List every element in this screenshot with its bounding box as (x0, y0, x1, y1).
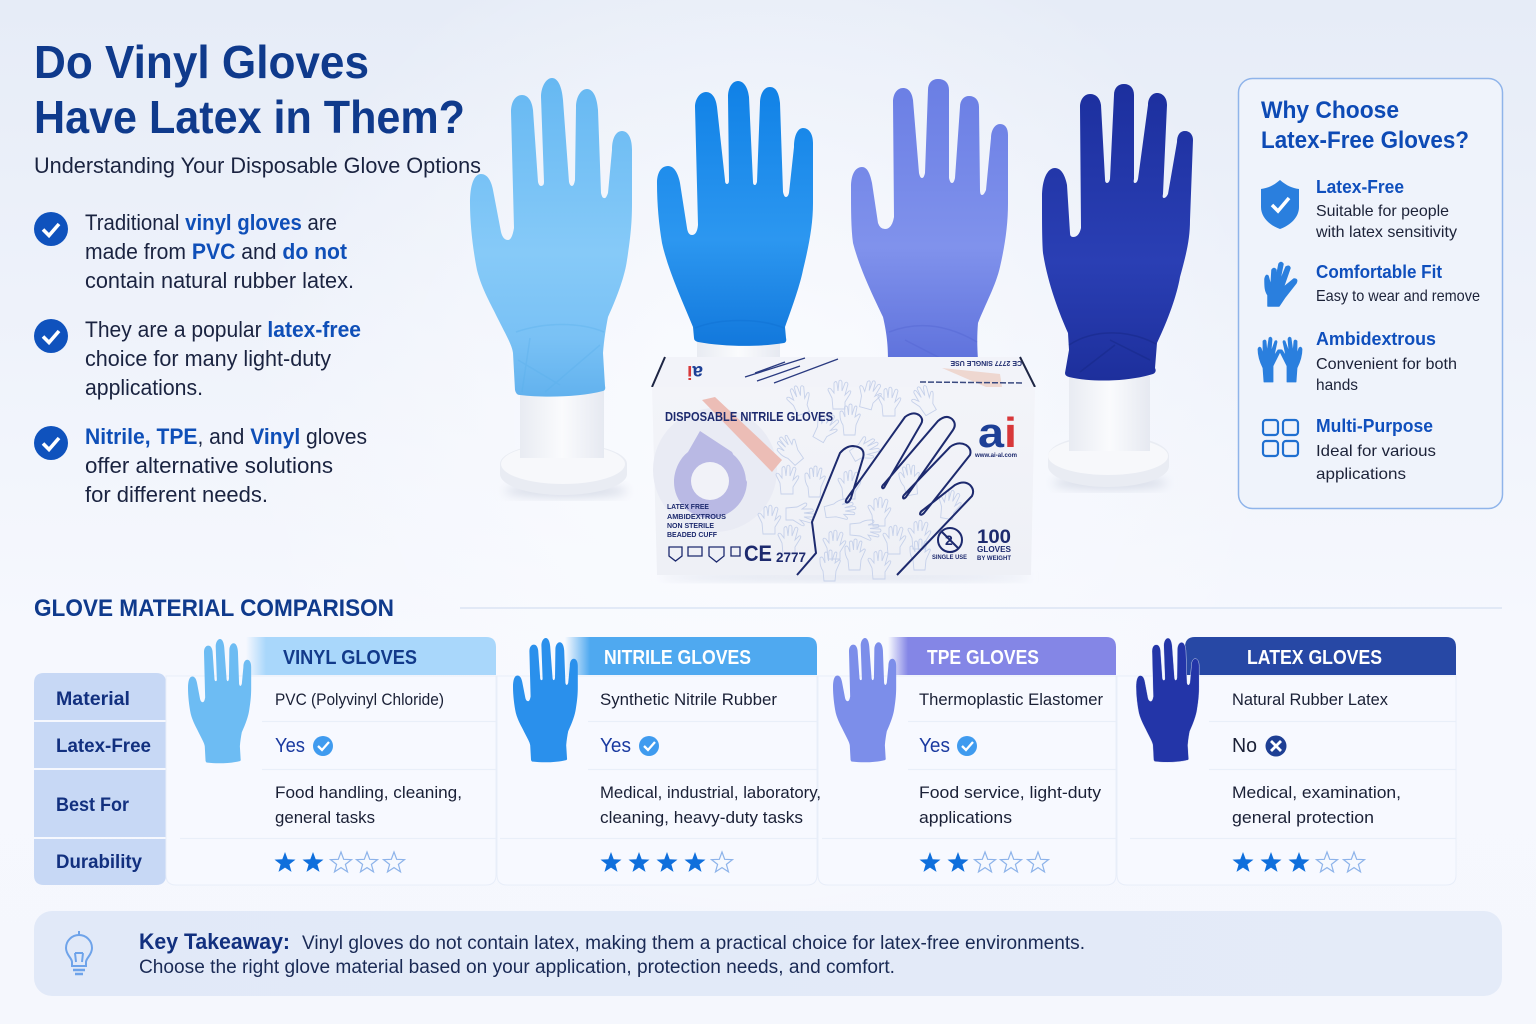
small vinyl glove (188, 639, 251, 763)
bullet list (34, 210, 367, 507)
box features list: NON STERILE (667, 523, 714, 530)
column: nitrile gloves: Synthetic Nitrile Rubber (600, 690, 777, 709)
takeaway text: Vinyl gloves do not contain latex, making them a practical choice for latex-free environments. (302, 933, 1085, 954)
glove: periwinkle TPE (851, 79, 1008, 360)
row labels: Material (56, 689, 130, 710)
title (34, 36, 465, 143)
row labels: Durability (56, 852, 142, 873)
item: latex-free (1315, 177, 1457, 241)
column: nitrile gloves: Yes (600, 735, 631, 757)
small tpe glove (833, 638, 896, 762)
bullet 3: Nitrile, TPE, and Vinyl gloves (85, 424, 367, 449)
tpe header (888, 637, 1116, 675)
box top face: CE 2777 SINGLE USE (950, 359, 1022, 366)
panel heading: Latex-Free Gloves? (1261, 127, 1469, 154)
box certification marks: CE (744, 541, 772, 566)
panel: why choose latex-free gloves (1238, 78, 1502, 508)
bullet 2: choice for many light-duty (85, 346, 331, 371)
no cross (1266, 736, 1286, 756)
box top face: ai (687, 361, 703, 382)
icon: lightbulb (66, 931, 92, 974)
latex header (1185, 637, 1456, 675)
icon: grid (1263, 420, 1298, 456)
box certification marks (669, 541, 806, 566)
durability stars (600, 852, 732, 872)
bullet 1 (34, 210, 354, 293)
single use mark (932, 528, 967, 561)
icon: shield (1261, 180, 1299, 229)
item: multi-purpose: Ideal for various (1316, 443, 1436, 460)
nitrile header: NITRILE GLOVES (604, 647, 751, 669)
item: ambidextrous: Ambidextrous (1316, 329, 1436, 349)
yes check (639, 736, 659, 756)
box artwork: small hand pattern (758, 378, 963, 581)
column: nitrile gloves (497, 637, 821, 885)
box logo: ai (978, 409, 1017, 456)
column: nitrile gloves: cleaning, heavy-duty tasks (600, 808, 803, 827)
column: tpe gloves: Thermoplastic Elastomer (919, 690, 1103, 709)
title: Do Vinyl Gloves (34, 36, 369, 88)
column: latex gloves: Medical, examination, (1232, 783, 1401, 802)
column: tpe gloves: Food service, light-duty (919, 783, 1102, 802)
product box (652, 357, 1035, 581)
stand: nitrile glove (697, 338, 780, 362)
bullet 3: offer alternative solutions (85, 453, 333, 478)
single use mark: 2 (945, 532, 953, 548)
column: tpe gloves: applications (919, 808, 1012, 827)
column: vinyl gloves: general tasks (275, 808, 375, 827)
item: multi-purpose (1316, 416, 1436, 483)
column: nitrile gloves: Medical, industrial, laboratory, (600, 783, 821, 802)
column: vinyl gloves: Food handling, cleaning, (275, 783, 462, 802)
item: comfortable fit (1316, 262, 1480, 305)
column: latex gloves: general protection (1232, 808, 1374, 827)
column: vinyl gloves: PVC (Polyvinyl Chloride) (275, 690, 444, 709)
box features list: LATEX FREE (667, 504, 709, 511)
small latex glove (1136, 638, 1199, 762)
nitrile header (565, 637, 817, 675)
item: multi-purpose: applications (1316, 466, 1406, 483)
box logo: www.ai-al.com (974, 453, 1017, 459)
panel heading: Why Choose (1261, 97, 1399, 124)
stand: light blue glove (500, 390, 628, 497)
bullet 1: made from PVC and do not (85, 239, 348, 264)
item: latex-free: with latex sensitivity (1315, 224, 1457, 241)
icon: two hands (1258, 337, 1302, 382)
column: latex gloves: Natural Rubber Latex (1232, 690, 1388, 709)
row labels: Latex-Free (56, 736, 151, 757)
box heading: DISPOSABLE NITRILE GLOVES (665, 410, 833, 424)
bullet 2 (34, 317, 361, 400)
title: Have Latex in Them? (34, 91, 465, 143)
tpe header: TPE GLOVES (927, 647, 1039, 669)
box features list: BEADED CUFF (667, 532, 718, 539)
column: vinyl gloves (166, 637, 496, 885)
bullet 1: contain natural rubber latex. (85, 268, 354, 293)
vinyl header: VINYL GLOVES (283, 647, 417, 669)
stand: dark blue glove (1048, 376, 1169, 489)
bullet 1: Traditional vinyl gloves are (85, 210, 337, 235)
box count: 100 (977, 527, 1011, 548)
durability stars (1232, 852, 1364, 872)
box features list: AMBIDEXTROUS (667, 514, 726, 521)
box count (977, 527, 1012, 562)
box top face (652, 357, 1035, 387)
latex header: LATEX GLOVES (1247, 647, 1382, 669)
box certification marks: 2777 (776, 549, 806, 565)
bullet 3: for different needs. (85, 482, 268, 507)
box artwork: seal graphic (653, 397, 782, 532)
glove: light blue vinyl (470, 78, 632, 397)
comparison heading: GLOVE MATERIAL COMPARISON (34, 595, 394, 622)
small nitrile glove (513, 638, 578, 762)
durability stars (274, 852, 404, 872)
item: ambidextrous (1316, 329, 1457, 394)
item: latex-free: Latex-Free (1316, 177, 1404, 197)
yes check (957, 736, 977, 756)
row labels: Best For (56, 795, 130, 816)
bullet 2: They are a popular latex-free (85, 317, 361, 342)
glove: dark blue latex (1042, 84, 1193, 381)
box features list (667, 504, 726, 539)
column: tpe gloves (818, 637, 1116, 885)
comparison table (34, 637, 1456, 885)
yes check (313, 736, 333, 756)
key takeaway banner (34, 911, 1502, 996)
box front face (652, 387, 1035, 575)
glove: blue nitrile (657, 81, 813, 346)
bullet 2: applications. (85, 375, 203, 400)
bullet 3 (34, 424, 367, 507)
box count: BY WEIGHT (977, 556, 1011, 562)
durability stars (920, 852, 1048, 872)
item: comfortable fit: Comfortable Fit (1316, 262, 1442, 282)
single use mark: SINGLE USE (932, 555, 967, 561)
box count: GLOVES (977, 545, 1012, 554)
column: vinyl gloves: Yes (275, 735, 305, 757)
row labels (34, 673, 166, 885)
item: multi-purpose: Multi-Purpose (1316, 416, 1433, 436)
column: tpe gloves: Yes (919, 735, 950, 757)
column: latex gloves: No (1232, 735, 1257, 757)
item: ambidextrous: hands (1316, 377, 1358, 394)
item: comfortable fit: Easy to wear and remove (1316, 288, 1480, 305)
vinyl header (246, 637, 496, 675)
panel heading (1261, 97, 1469, 154)
takeaway text: Key Takeaway: (139, 929, 290, 954)
subtitle: Understanding Your Disposable Glove Options (34, 153, 481, 178)
takeaway text (139, 929, 1085, 978)
box artwork: large hand outline (797, 413, 973, 575)
column: latex gloves (1117, 637, 1456, 885)
icon: hand (1265, 262, 1297, 306)
takeaway text: Choose the right glove material based on your application, protection needs, and comfort. (139, 957, 895, 978)
item: ambidextrous: Convenient for both (1316, 356, 1457, 373)
item: latex-free: Suitable for people (1316, 203, 1449, 220)
